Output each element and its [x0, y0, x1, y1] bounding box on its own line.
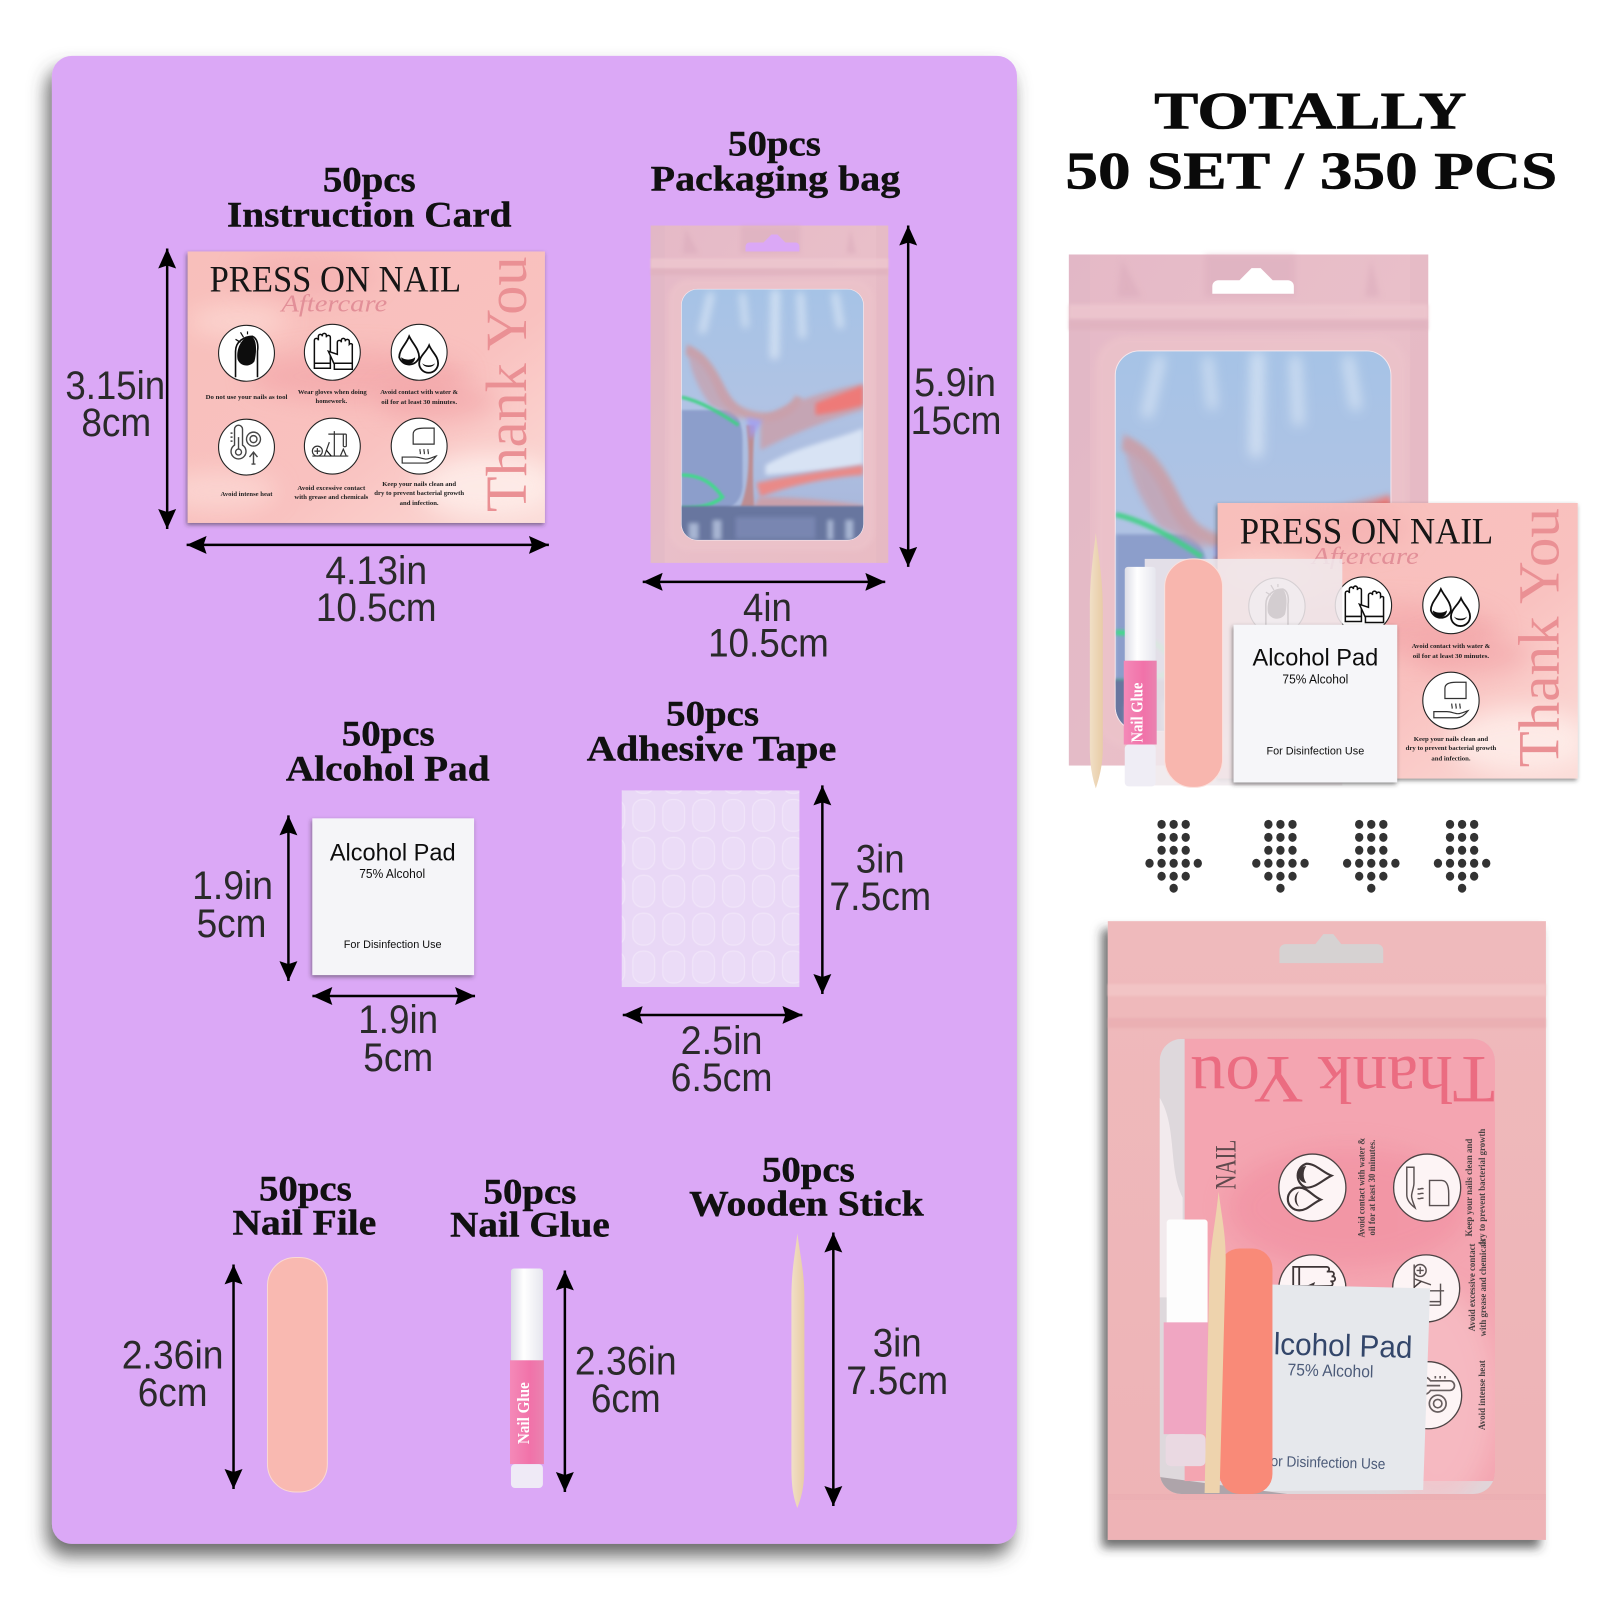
packaging bag image	[651, 226, 888, 563]
dimension: bag height: 15cm	[911, 399, 1001, 443]
alcohol pad image: 75% Alcohol	[359, 866, 425, 881]
alcohol pad small: Alcohol Pad	[1252, 645, 1378, 672]
dimension: tape width: 2.5in	[681, 1019, 762, 1063]
dimension: card width: 4.13in	[325, 549, 427, 593]
dimension: tape width	[671, 1019, 772, 1100]
packed card: oil for at least 30 minutes.	[1367, 1140, 1377, 1236]
dimension: pad height	[192, 864, 273, 946]
dimension: bag height: 5.9in	[914, 361, 996, 405]
heading: packaging bag: 50pcs	[728, 124, 821, 164]
title: 50 SET / 350 PCS	[1065, 143, 1557, 201]
instruction card image: Keep your nails clean and	[382, 481, 456, 488]
dimension: pad width: 5cm	[363, 1036, 433, 1080]
arrow: pad height	[287, 815, 290, 981]
dimension: card height: 3.15in	[65, 364, 165, 408]
heading: nail glue	[450, 1172, 610, 1245]
arrow: file height	[232, 1264, 235, 1489]
heading: nail file: 50pcs	[259, 1169, 352, 1209]
nail glue small: Nail Glue	[1128, 682, 1147, 743]
kit laid out	[1069, 254, 1590, 788]
packed card: Avoid excessive contact	[1467, 1244, 1477, 1331]
dimension: card width: 10.5cm	[316, 586, 437, 630]
instruction card image: Avoid excessive contact	[297, 485, 366, 492]
dimension: file height	[122, 1333, 224, 1415]
heading: nail glue: Nail Glue	[450, 1205, 610, 1245]
adhesive tape image	[622, 790, 799, 987]
dotted arrow 3	[1343, 820, 1400, 893]
heading: alcohol pad	[286, 714, 490, 788]
instruction card image: with grease and chemicals	[294, 494, 369, 501]
section: nail file	[122, 1169, 376, 1492]
arrow: bag height	[907, 226, 909, 567]
instruction card image	[158, 251, 557, 523]
dimension: pad width: 1.9in	[358, 998, 438, 1042]
dimension: pad width	[358, 998, 438, 1080]
title	[1065, 83, 1557, 201]
section: adhesive tape	[587, 694, 931, 1100]
heading: packaging bag	[651, 124, 900, 199]
dimension: stick height	[846, 1321, 948, 1403]
arrow: tape width	[623, 1014, 802, 1016]
dimension: tape height: 3in	[856, 837, 905, 881]
packed nail file	[1220, 1249, 1272, 1494]
nail glue image	[510, 1268, 544, 1488]
packed card: NAIL	[1210, 1140, 1243, 1190]
alcohol pad image	[312, 818, 474, 975]
dimension: stick height: 3in	[873, 1321, 922, 1365]
instruction card image: oil for at least 30 minutes.	[381, 399, 457, 406]
adhesive tape small	[1145, 559, 1342, 785]
dimension: stick height: 7.5cm	[846, 1359, 948, 1403]
dotted arrows	[1145, 820, 1490, 893]
packed alcohol pad: 75% Alcohol	[1287, 1360, 1374, 1381]
alcohol pad image: Alcohol Pad	[330, 839, 456, 866]
heading: wooden stick: Wooden Stick	[689, 1184, 924, 1224]
zip band	[1108, 984, 1546, 1028]
dimension: file height: 6cm	[138, 1371, 208, 1415]
heading: wooden stick	[689, 1150, 924, 1224]
nail file image	[267, 1257, 327, 1492]
instruction card large: oil for at least 30 minutes.	[1413, 653, 1490, 660]
section: nail glue	[450, 1172, 677, 1492]
heading: adhesive tape: Adhesive Tape	[587, 728, 836, 768]
heading: instruction card	[227, 160, 512, 235]
dimension: card height	[65, 364, 165, 445]
dimension: bag width	[708, 586, 829, 666]
dimension: card height: 8cm	[81, 401, 151, 445]
packed card: with grease and chemicals	[1478, 1238, 1488, 1336]
instruction card large: dry to prevent bacterial growth	[1406, 745, 1497, 752]
packed wooden stick	[1205, 1192, 1226, 1493]
dimension: pad height: 5cm	[197, 902, 266, 946]
instruction card image: Aftercare	[279, 291, 388, 317]
panel: sizes	[52, 56, 1017, 1544]
instruction card large	[1187, 503, 1590, 779]
heading: instruction card: Instruction Card	[227, 195, 512, 235]
arrow: pad width	[312, 995, 475, 997]
window and contents	[1160, 1037, 1497, 1507]
heading: instruction card: 50pcs	[323, 160, 416, 200]
packed card: dry to prevent bacterial growth	[1477, 1129, 1487, 1247]
heading: alcohol pad: Alcohol Pad	[286, 748, 490, 788]
dimension: bag width: 10.5cm	[708, 622, 829, 666]
hang hole	[1279, 934, 1383, 963]
instruction card large: PRESS ON NAIL	[1240, 511, 1493, 553]
section: instruction card	[65, 160, 557, 630]
arrow: glue height	[564, 1270, 566, 1492]
packed bag	[1108, 921, 1546, 1540]
instruction card image: Avoid intense heat	[221, 491, 273, 498]
instruction card image: Thank You	[474, 256, 539, 512]
nail glue image: Nail Glue	[514, 1382, 533, 1444]
heading: packaging bag: Packaging bag	[651, 159, 900, 199]
heading: alcohol pad: 50pcs	[342, 714, 435, 754]
instruction card image: Wear gloves when doing	[298, 389, 367, 396]
dimension: tape height: 7.5cm	[829, 875, 931, 919]
dimension: file height: 2.36in	[122, 1333, 224, 1377]
packed card	[1185, 1037, 1497, 1507]
arrow: stick height	[832, 1233, 835, 1506]
nail glue small	[1124, 567, 1157, 786]
dotted arrow 1	[1145, 820, 1202, 893]
alcohol pad small: 75% Alcohol	[1282, 672, 1348, 687]
packed alcohol pad	[1259, 1284, 1430, 1491]
heading: adhesive tape	[587, 694, 836, 768]
instruction card image: Do not use your nails as tool	[206, 394, 288, 401]
dimension: pad height: 1.9in	[192, 864, 273, 908]
bag body	[1108, 921, 1546, 1540]
instruction card large: Thank You	[1507, 508, 1572, 767]
section: wooden stick	[689, 1150, 948, 1508]
arrow: tape height	[821, 785, 824, 994]
heading: wooden stick: 50pcs	[762, 1150, 855, 1190]
heading: nail file: Nail File	[233, 1203, 376, 1243]
instruction card image: homework.	[316, 398, 347, 405]
dimension: bag width: 4in	[743, 586, 792, 630]
alcohol pad image: For Disinfection Use	[344, 939, 442, 951]
dimension: card width	[316, 549, 437, 630]
arrow: bag width	[643, 581, 885, 583]
heading: nail glue: 50pcs	[484, 1172, 576, 1212]
heading: adhesive tape: 50pcs	[666, 694, 759, 734]
instruction card image: Avoid contact with water &	[380, 389, 459, 396]
dotted arrow 2	[1252, 820, 1309, 893]
packed card: Keep your nails clean and	[1464, 1139, 1474, 1237]
instruction card large: and infection.	[1431, 755, 1471, 762]
instruction card large: Avoid contact with water &	[1412, 643, 1491, 650]
instruction card image: PRESS ON NAIL	[210, 258, 461, 299]
dimension: bag height	[911, 361, 1001, 443]
dimension: glue height: 2.36in	[575, 1339, 677, 1383]
instruction card image: dry to prevent bacterial growth	[374, 490, 464, 497]
packed card: Avoid intense heat	[1477, 1360, 1487, 1430]
instruction card large: Keep your nails clean and	[1414, 736, 1488, 743]
title: TOTALLY	[1154, 83, 1467, 141]
instruction card image: and infection.	[400, 500, 439, 507]
packed alcohol pad: lcohol Pad	[1273, 1326, 1413, 1365]
alcohol pad small	[1234, 625, 1397, 782]
alcohol pad small: For Disinfection Use	[1266, 745, 1364, 757]
arrow: card height	[166, 249, 168, 529]
large packaging bag	[1069, 254, 1428, 766]
wooden stick small	[1090, 533, 1103, 788]
packed card: Thank You	[1191, 1042, 1495, 1117]
dotted arrow 4	[1434, 820, 1490, 893]
packing film	[1108, 1494, 1546, 1500]
dimension: glue height	[575, 1339, 677, 1421]
wooden stick image	[791, 1234, 804, 1508]
packed nail glue	[1164, 1220, 1208, 1466]
dimension: tape height	[829, 837, 931, 919]
dimension: tape width: 6.5cm	[671, 1056, 772, 1100]
section: packaging bag	[643, 124, 1001, 666]
packed alcohol pad: or Disinfection Use	[1270, 1453, 1386, 1473]
instruction card large: Aftercare	[1310, 543, 1419, 570]
arrow: card width	[187, 544, 549, 546]
section: alcohol pad	[192, 714, 490, 1080]
packed card: Avoid contact with water &	[1356, 1137, 1366, 1238]
dimension: glue height: 6cm	[591, 1377, 661, 1421]
nail file small	[1165, 559, 1223, 787]
heading: nail file	[233, 1169, 376, 1243]
